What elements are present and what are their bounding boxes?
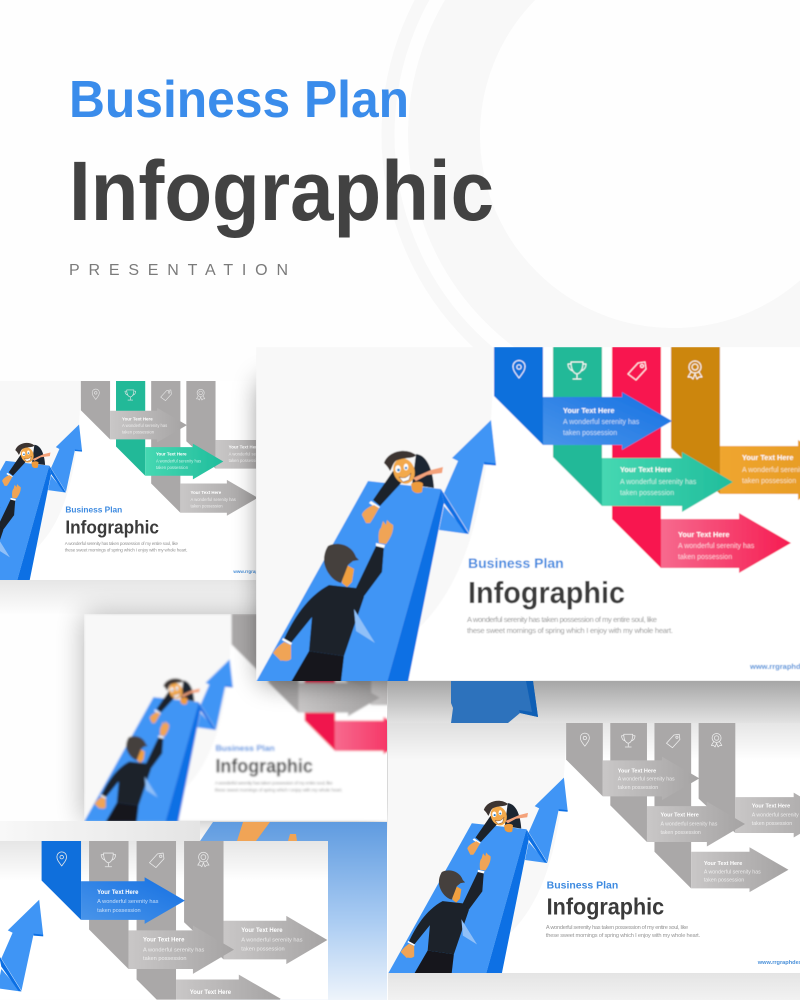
text: green arrow: A wonderful serenity has <box>620 479 697 486</box>
slide preview: right, all grey: Your Text Here <box>704 861 742 867</box>
slide preview: top left, green highlight: Infographic <box>65 517 159 538</box>
text: red arrow <box>678 530 755 561</box>
column and arrow: red <box>612 347 791 573</box>
slide preview: bottom left, blue highlight: A wonderful serenity has <box>143 947 204 953</box>
slide preview: top left, green highlight: A wonderful serenity has <box>229 451 274 456</box>
slide preview: bottom left, blue highlight: taken possession <box>97 908 141 914</box>
slide heading: Business Plan <box>468 555 564 571</box>
slide preview: bottom left, blue highlight: A wonderful serenity has <box>241 938 303 944</box>
slide preview: top left, green highlight: Your Text Here <box>229 444 260 449</box>
slide preview: top left, green highlight: Your Text Here <box>122 416 153 421</box>
slide preview: blue backdrop behind bottom left <box>200 822 387 1000</box>
slide preview: top left, green highlight: these sweet mornings of spring which I enjoy with my whole heart. <box>65 547 188 552</box>
slide preview: right, all grey: A wonderful serenity has <box>618 777 675 783</box>
slide preview: blurred middle, red highlight: Infographic <box>215 757 313 778</box>
text: green arrow <box>620 465 697 497</box>
title: Business Plan: Business Plan <box>69 71 409 129</box>
slide preview: blurred middle, red highlight: A wonderful serenity has taken possession of my entire soul, like <box>215 781 333 786</box>
title: Infographic: Infographic <box>69 144 494 238</box>
text: orange arrow: Your Text Here <box>742 453 793 462</box>
column and arrow: green <box>553 347 733 512</box>
slide heading <box>468 555 625 610</box>
slide preview: right, all grey: Your Text Here <box>752 804 790 810</box>
slide preview: top left, green highlight: Business Plan <box>65 505 122 515</box>
slide preview: right, all grey: taken possession <box>704 878 744 884</box>
slide preview: bottom left, blue highlight: Your Text Here <box>241 928 283 934</box>
slide preview: bottom left, blue highlight: taken possession <box>241 946 285 952</box>
text: orange arrow: taken possession <box>742 478 796 485</box>
text: red arrow: Your Text Here <box>678 530 729 539</box>
slide preview: right, all grey: taken possession <box>752 821 792 827</box>
slide preview: right, all grey: Your Text Here <box>618 768 656 774</box>
slide preview: shadow band with blue arrow <box>388 681 800 723</box>
slide preview: top left, green highlight: A wonderful serenity has taken possession of my entire soul, like <box>65 541 178 546</box>
text: blue arrow: A wonderful serenity has <box>563 419 640 426</box>
slide preview: right, all grey: Infographic <box>547 894 664 920</box>
slide preview: top left, green highlight <box>0 381 256 580</box>
column and arrow: blue <box>494 347 672 450</box>
slide description: these sweet mornings of spring which I enjoy with my whole heart. <box>467 626 673 635</box>
subtitle: Presentation: PRESENTATION <box>69 262 288 279</box>
column and arrow: orange <box>671 347 800 500</box>
slide preview: top left, green highlight: taken possession <box>122 429 155 434</box>
text: green arrow: Your Text Here <box>620 465 671 474</box>
illustration: climbers on rising arrow <box>256 420 496 682</box>
text: orange arrow <box>742 453 800 485</box>
slide preview: right, all grey: Your Text Here <box>660 813 699 819</box>
background rings <box>388 0 800 420</box>
slide preview: top left, green highlight: taken possession <box>229 458 261 463</box>
backdrop shadow around middle slide <box>84 614 387 821</box>
slide preview: top left, green highlight: A wonderful serenity has <box>191 497 236 502</box>
slide preview: bottom left, blue highlight: Your Text Here <box>97 890 139 896</box>
slide preview: top left, green highlight: A wonderful serenity has <box>122 423 167 428</box>
slide preview: right, all grey: A wonderful serenity has <box>660 822 718 828</box>
slide preview: bottom band <box>388 973 800 1000</box>
backdrop band above bottom left slide <box>0 821 200 841</box>
slide preview: top left, green highlight: taken possession <box>191 503 223 508</box>
backdrop shadow below top left slide <box>0 580 256 614</box>
icons: pin, trophy, tag, medal <box>513 360 702 380</box>
slide description: A wonderful serenity has taken possession of my entire soul, like <box>467 615 657 624</box>
slide preview: blurred middle, red highlight: Business Plan <box>215 743 275 753</box>
text: blue arrow: taken possession <box>563 430 617 437</box>
slide preview: top left, green highlight: taken possession <box>156 465 189 470</box>
slide preview: blurred middle, red highlight: these sweet mornings of spring which I enjoy with my whole heart. <box>215 787 343 792</box>
slide heading: Infographic <box>468 575 625 610</box>
text: red arrow: taken possession <box>678 554 732 561</box>
slide preview: bottom left, blue highlight: Your Text Here <box>143 938 185 944</box>
slide preview: right, all grey: Business Plan <box>547 880 618 891</box>
text: red arrow: A wonderful serenity has <box>678 543 755 550</box>
slide preview: bottom left, blue highlight: Your Text Here <box>190 990 232 996</box>
main slide: full colour <box>256 347 800 682</box>
slide preview: top left, green highlight: www.rrgraphdesign.com <box>232 569 286 574</box>
slide preview: bottom left, blue highlight <box>0 841 328 1000</box>
slide preview: right, all grey <box>388 723 800 974</box>
slide preview: top left, green highlight: Your Text Here <box>156 451 187 456</box>
text: blue arrow <box>563 406 640 437</box>
slide preview: right, all grey: these sweet mornings of spring which I enjoy with my whole heart. <box>546 933 701 939</box>
slide description <box>467 615 673 635</box>
slide preview: top left, green highlight: Your Text Here <box>191 490 222 495</box>
text: green arrow: taken possession <box>620 490 674 497</box>
slide preview: right, all grey: A wonderful serenity has taken possession of my entire soul, like <box>546 925 688 931</box>
slide preview: right, all grey: taken possession <box>660 830 701 836</box>
slide preview: bottom left, blue highlight: taken possession <box>143 956 186 962</box>
slide preview: right, all grey: A wonderful serenity has <box>704 869 761 875</box>
slide preview: top left, green highlight: A wonderful serenity has <box>156 459 201 464</box>
slide preview: bottom left, blue highlight: A wonderful serenity has <box>97 899 159 905</box>
main slide drop shadow <box>262 382 800 681</box>
text: blue arrow: Your Text Here <box>563 406 614 415</box>
slide preview: blurred middle, red highlight <box>84 614 387 821</box>
slide preview: right, all grey: taken possession <box>618 785 658 791</box>
